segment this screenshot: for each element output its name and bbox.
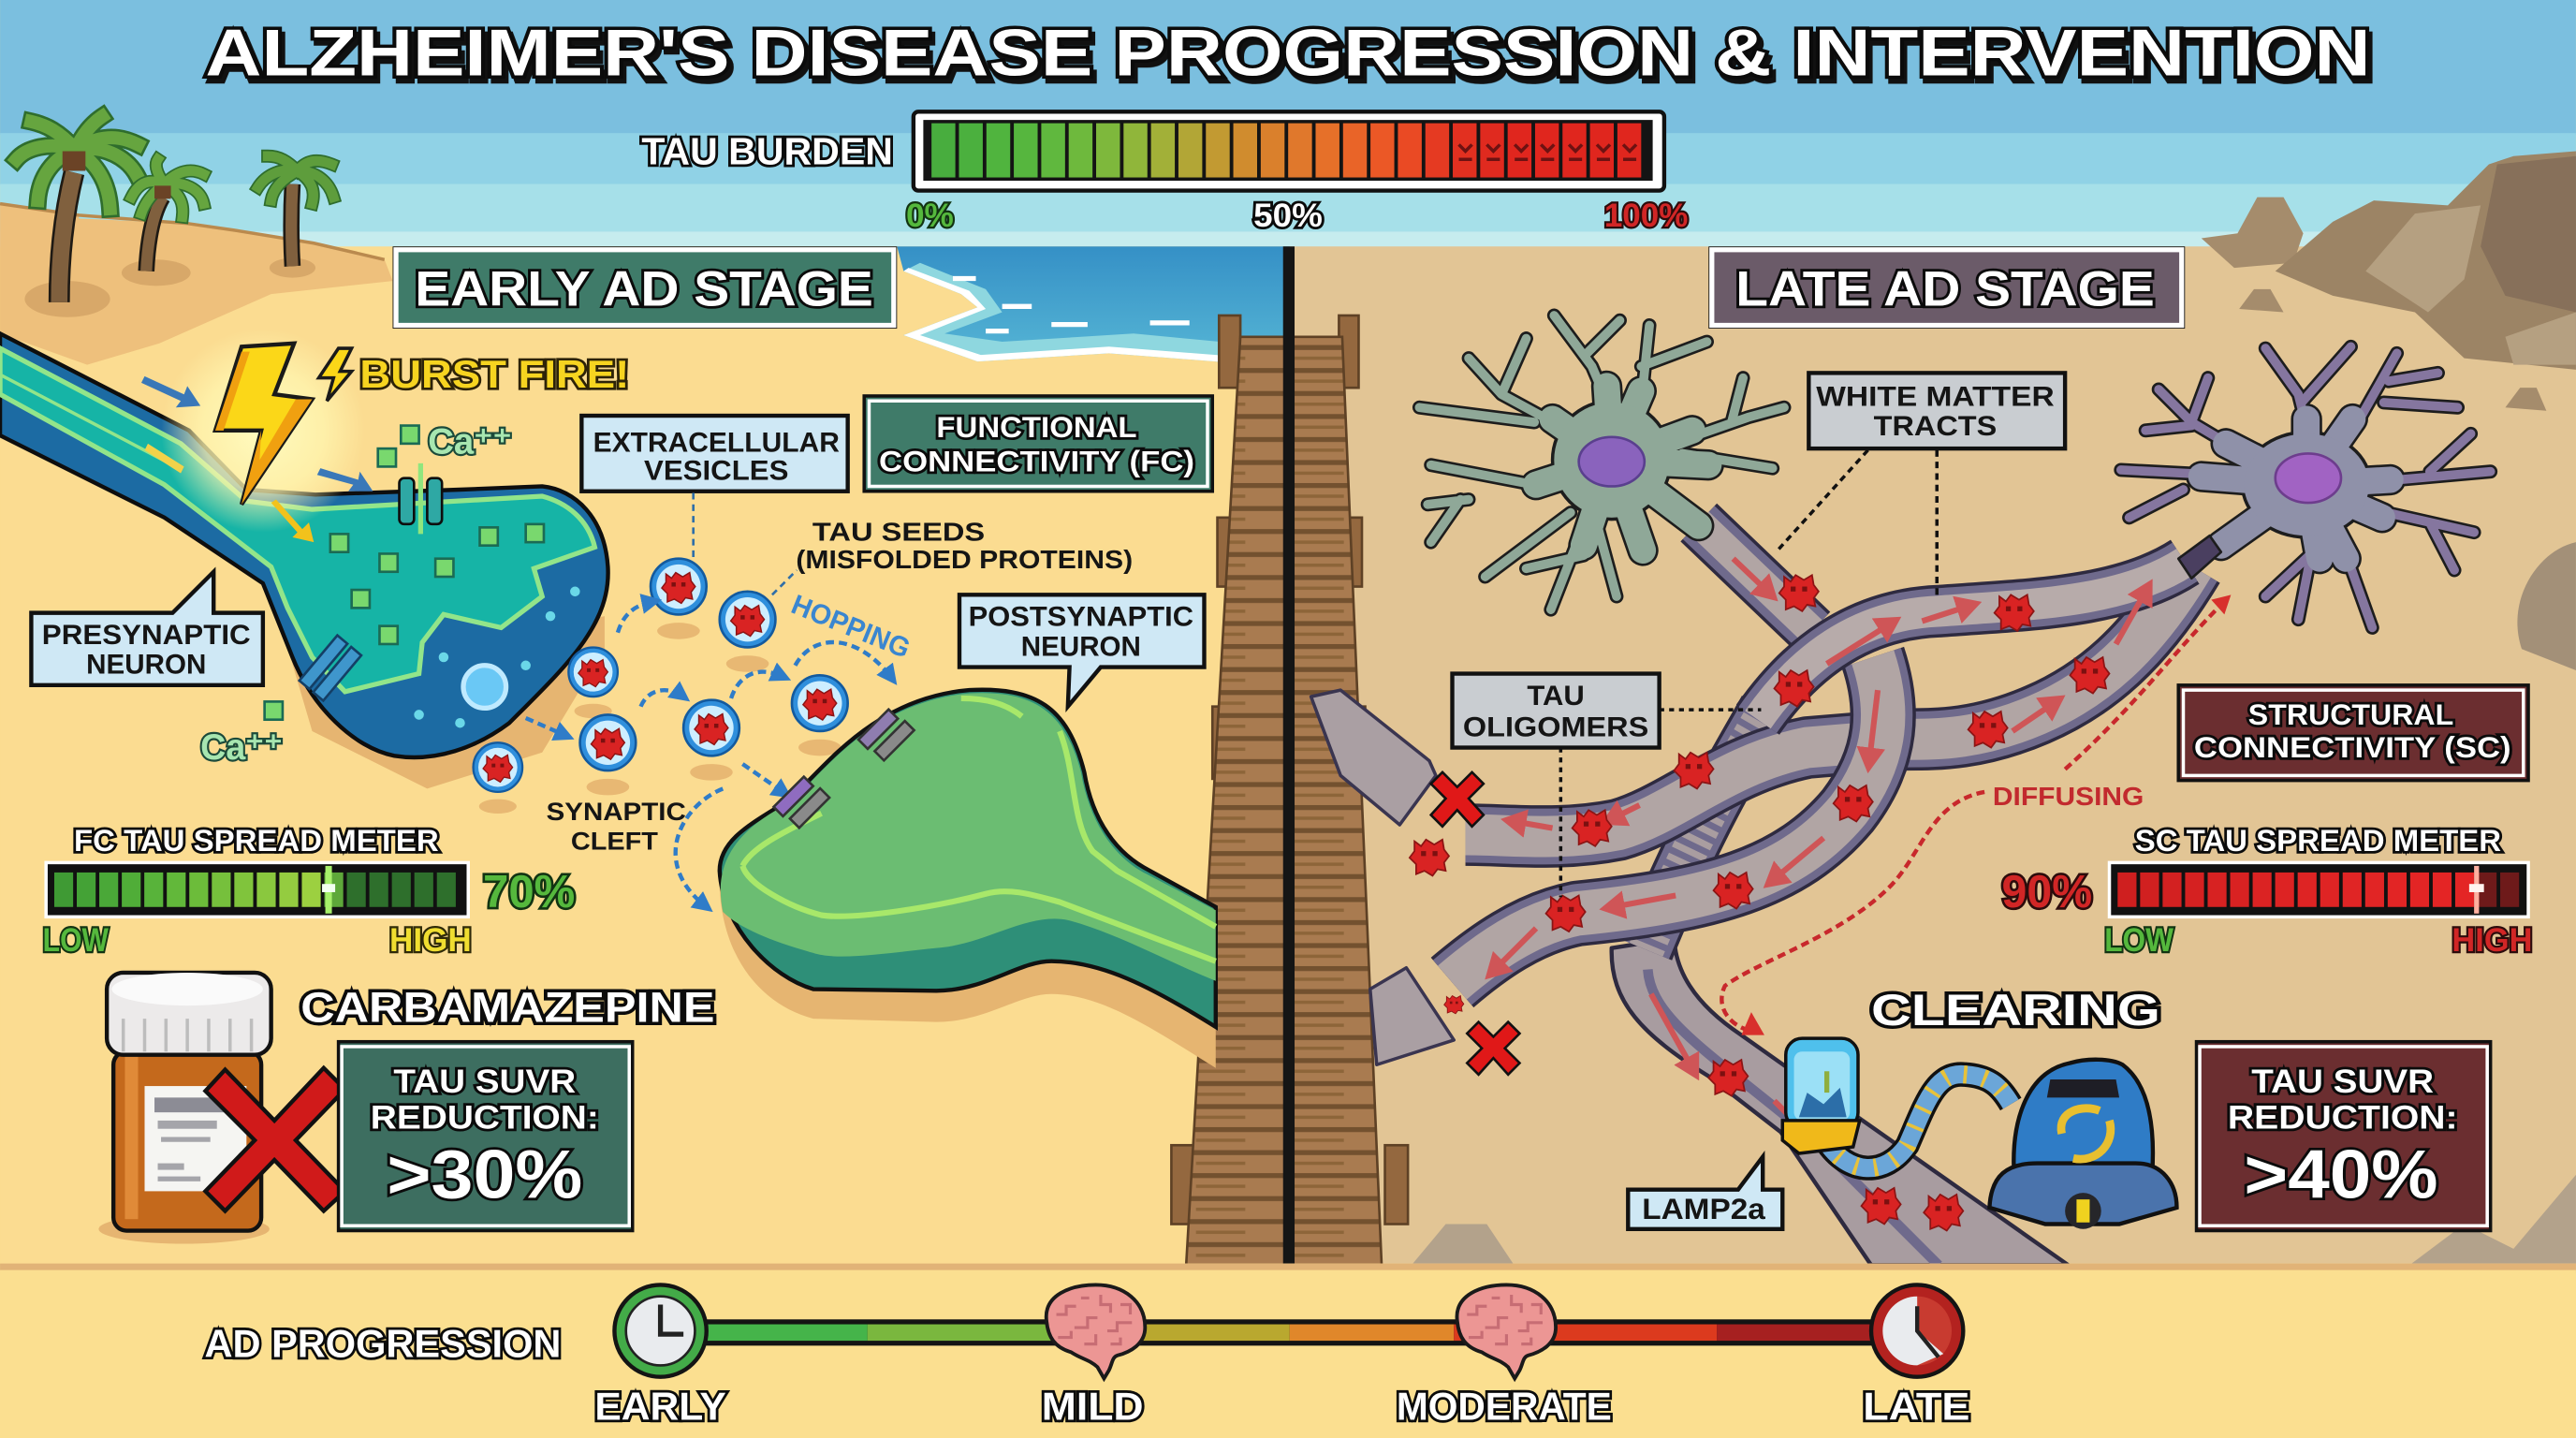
tract from left neuron upper: [1699, 522, 1812, 631]
FC tau spread meter: HIGH: [389, 922, 472, 959]
callout arrows on axon: [141, 376, 373, 542]
tau burden axis labels: 100%: [1604, 198, 1688, 234]
panel: late AD stage: [1311, 315, 2532, 1265]
early AD stage banner: EARLY AD STAGE: [415, 261, 873, 316]
icon: late clock: [1871, 1284, 1963, 1377]
icon: crossed-out pill bottle: [98, 973, 345, 1244]
clearing label: CLEARING: [1871, 986, 2160, 1035]
dashed leader: [694, 493, 797, 594]
diffusing label: DIFFUSING: [1993, 782, 2144, 811]
calcium label bottom: Ca⁺⁺: [200, 727, 283, 768]
tau oligomers label: OLIGOMERS: [1463, 712, 1648, 742]
tau seeds label: [796, 517, 1133, 574]
icon: mild brain: [1046, 1284, 1145, 1378]
icon: diffusing arrowheads: [1741, 594, 2231, 1035]
icon: moderate brain: [1456, 1284, 1556, 1378]
FC tau spread meter: FC TAU SPREAD METER: [74, 824, 439, 858]
functional connectivity banner: FUNCTIONAL: [936, 410, 1137, 444]
rocks: upper right: [2202, 151, 2576, 411]
extracellular vesicles label: [581, 416, 848, 492]
tau burden axis labels: 0%: [906, 198, 954, 234]
tract from left neuron lower: [1453, 657, 1883, 983]
presynaptic neuron label: NEURON: [86, 650, 206, 681]
stage labels: LATE: [1863, 1384, 1969, 1428]
tau oligomers label: TAU: [1527, 681, 1585, 712]
late tau SUVR reduction box: TAU SUVR: [2251, 1064, 2434, 1100]
synaptic cleft label: [547, 797, 686, 855]
tau burden label: TAU BURDEN: [641, 130, 893, 173]
stage labels: MODERATE: [1397, 1384, 1612, 1428]
stage labels: MILD: [1042, 1384, 1144, 1428]
stage labels: EARLY: [594, 1384, 726, 1428]
tau oligomers on tracts: [1410, 575, 2110, 1231]
extracellular vesicles label: VESICLES: [644, 455, 788, 486]
structural connectivity banner: [2178, 685, 2528, 781]
calcium label top: Ca⁺⁺: [428, 421, 512, 462]
AD progression label: AD PROGRESSION: [205, 1322, 561, 1366]
structural connectivity banner: CONNECTIVITY (SC): [2194, 730, 2511, 764]
white matter tracts label: [1778, 373, 2065, 596]
icon: lightning bolt: [161, 329, 365, 533]
SC tau spread meter: SC TAU SPREAD METER: [2135, 824, 2501, 858]
tau burden bar: [914, 111, 1664, 191]
presynaptic neuron: [0, 333, 608, 788]
icon: vacuum clearing device: [1782, 1038, 2176, 1229]
palm trees: [17, 117, 333, 317]
red arrows along tracts: [1495, 559, 2145, 1142]
late AD stage banner: LATE AD STAGE: [1735, 261, 2155, 316]
progression bar: [703, 1319, 1880, 1345]
tau seed vesicles: [474, 559, 848, 814]
stage labels: [594, 1384, 1969, 1428]
LAMP2a label: [1628, 1157, 1782, 1229]
tau burden axis labels: [906, 198, 1688, 234]
tau burden axis labels: 50%: [1253, 198, 1323, 234]
carbamazepine label: CARBAMAZEPINE: [300, 984, 714, 1032]
white matter tracts: [1311, 522, 2193, 1265]
hopping label: HOPPING: [787, 589, 915, 665]
rocks: lower right and edge: [1405, 542, 2576, 1273]
postsynaptic neuron label: [959, 594, 1204, 707]
presynaptic neuron label: [31, 572, 263, 685]
tau oligomers label: [1453, 674, 1761, 897]
late AD stage banner: [1708, 246, 2185, 329]
white matter tracts label: WHITE MATTER: [1816, 381, 2055, 412]
extracellular vesicles label: EXTRACELLULAR: [593, 428, 840, 459]
SC tau spread meter: 90%: [2002, 867, 2092, 917]
functional connectivity banner: CONNECTIVITY (FC): [879, 445, 1194, 478]
late tau SUVR reduction box: [2197, 1042, 2491, 1231]
hopping arrows: [526, 601, 892, 907]
postsynaptic neuron: [720, 690, 1216, 1068]
panel: early AD stage: [0, 329, 1216, 1244]
synaptic cleft label: CLEFT: [571, 826, 658, 855]
late tau SUVR reduction box: REDUCTION:: [2228, 1100, 2458, 1137]
structural connectivity banner: STRUCTURAL: [2248, 697, 2453, 731]
icon: break marks X: [1431, 772, 1519, 1075]
broken tract stubs: [1311, 690, 1454, 1064]
icon: small lightning bolt: [319, 348, 352, 401]
panel: AD progression timeline: [0, 1264, 2576, 1438]
tau seeds label: (MISFOLDED PROTEINS): [796, 545, 1133, 574]
icon: early clock: [614, 1284, 707, 1377]
white matter tracts label: TRACTS: [1874, 411, 1997, 442]
LAMP2a label: LAMP2a: [1642, 1192, 1765, 1225]
presynaptic neuron label: PRESYNAPTIC: [42, 620, 251, 651]
tract descending to clearing: [1612, 710, 2069, 1265]
SC tau spread meter: LOW: [2104, 922, 2174, 959]
left neuron: [1419, 315, 1784, 609]
boardwalk divider: [1171, 246, 1408, 1269]
tract to right neuron upper: [1758, 562, 2185, 720]
title: ALZHEIMER'S DISEASE PROGRESSION & INTERVENTION: [205, 16, 2371, 90]
tau seeds label: TAU SEEDS: [812, 517, 985, 546]
right neuron: [2121, 346, 2491, 627]
postsynaptic neuron label: POSTSYNAPTIC: [969, 602, 1193, 633]
late tau SUVR reduction box: >40%: [2244, 1135, 2438, 1212]
postsynaptic neuron label: NEURON: [1021, 631, 1141, 662]
functional connectivity banner: [864, 396, 1212, 492]
lower right tract: [1466, 566, 2193, 837]
early AD stage banner: [393, 246, 897, 329]
early tau SUVR reduction box: >30%: [387, 1135, 582, 1212]
early tau SUVR reduction box: REDUCTION:: [371, 1100, 599, 1137]
SC tau spread meter: HIGH: [2452, 922, 2532, 959]
SC tau spread meter: [2002, 824, 2532, 959]
FC tau spread meter: 70%: [483, 867, 575, 917]
early tau SUVR reduction box: TAU SUVR: [393, 1064, 576, 1100]
FC tau spread meter: [43, 824, 575, 959]
FC tau spread meter: LOW: [43, 922, 110, 959]
diffusing arrows: [1721, 601, 2224, 1032]
early tau SUVR reduction box: [339, 1042, 633, 1231]
synaptic cleft label: SYNAPTIC: [547, 797, 686, 826]
burst fire label: BURST FIRE!: [359, 352, 629, 396]
